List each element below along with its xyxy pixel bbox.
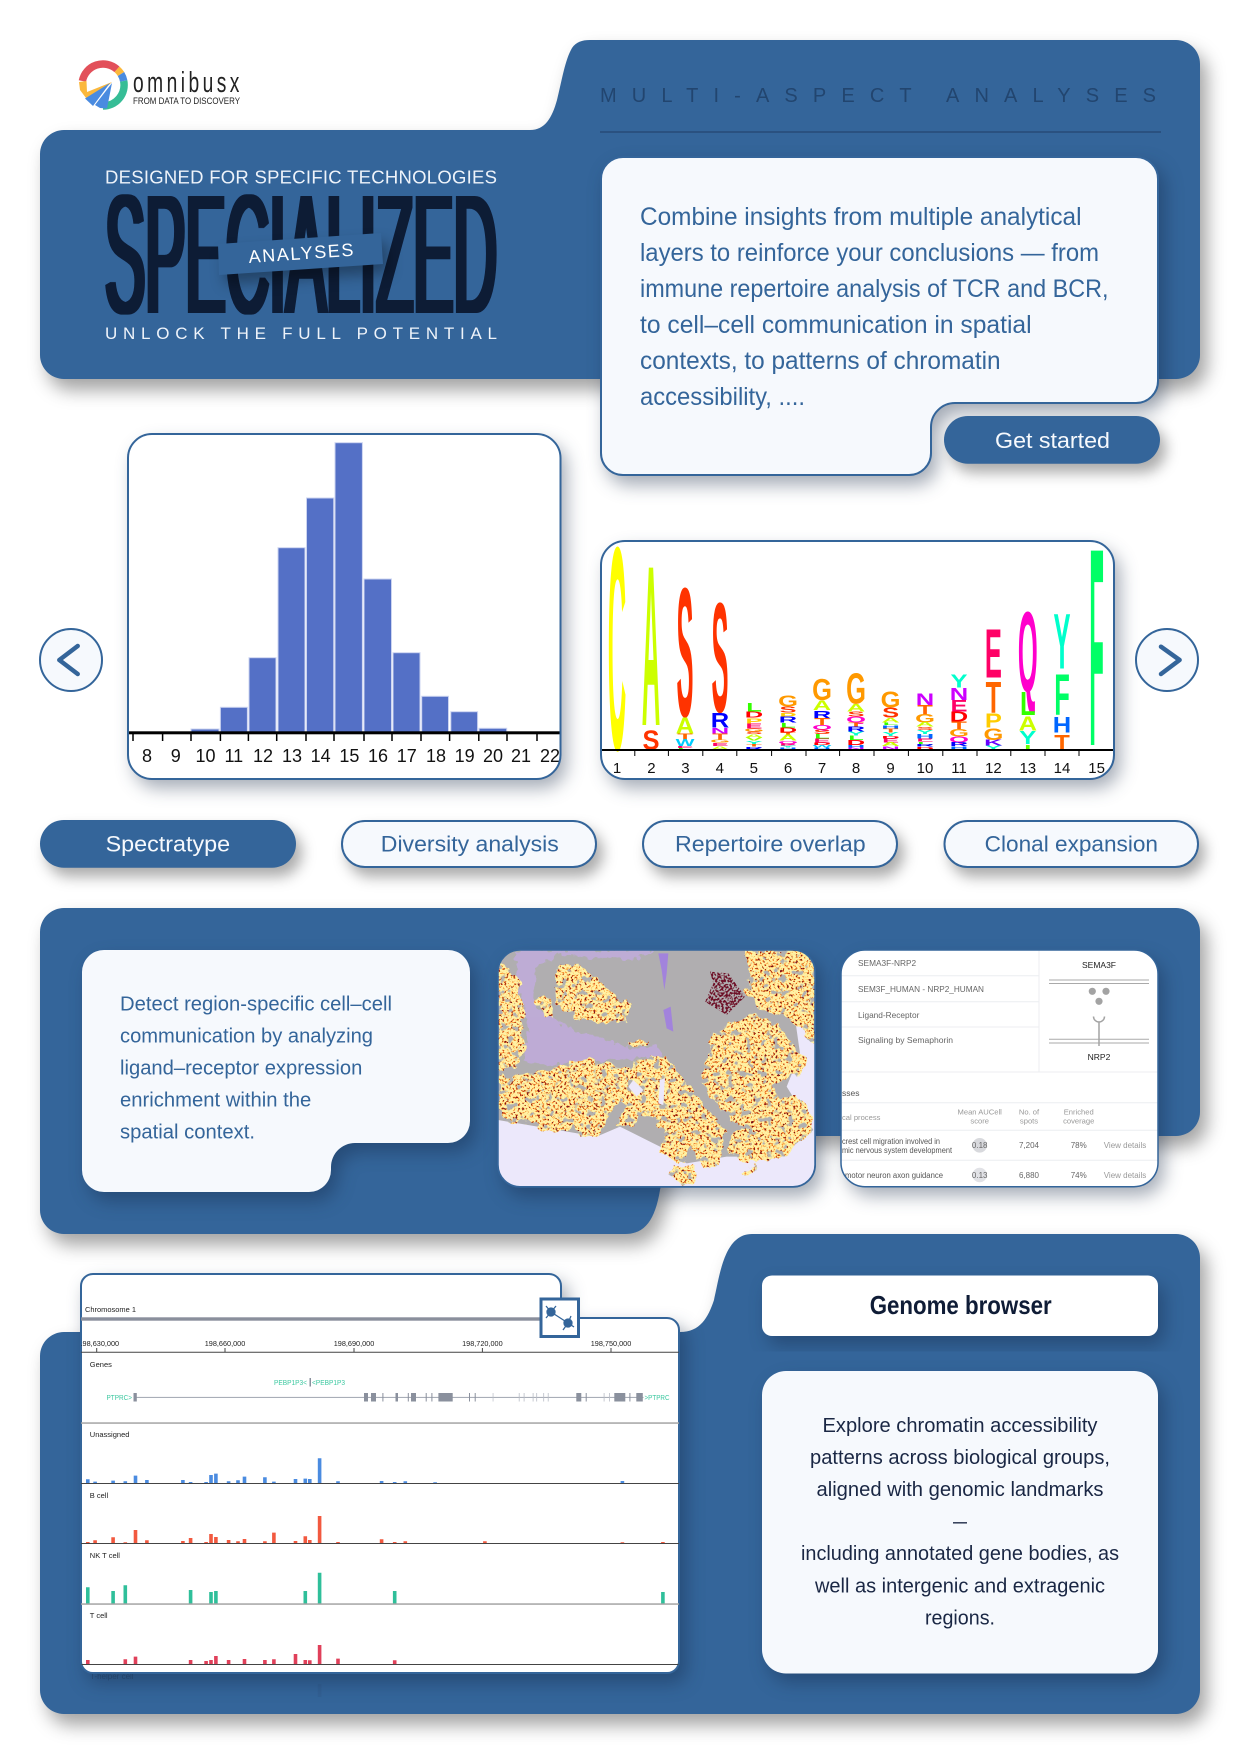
logo axis labels: 11 — [951, 760, 967, 777]
ligand receptor diagram — [1049, 960, 1149, 1062]
logo stacked letters: S — [916, 726, 934, 731]
tab: diversity analysis — [342, 821, 596, 867]
faint hidden track below chart — [90, 1672, 321, 1697]
processes table: 7,204 — [1019, 1141, 1040, 1150]
logo axis labels: 3 — [681, 760, 690, 777]
genome description text: patterns across biological groups, — [810, 1446, 1110, 1469]
histogram labels: 20 — [483, 746, 503, 766]
logo stacked letters: L — [746, 701, 762, 715]
logo stacked letters: R — [847, 725, 866, 733]
logo axis labels: 12 — [985, 760, 1002, 777]
logo stacked letters: L — [814, 733, 830, 740]
processes table: mic nervous system development — [842, 1146, 953, 1155]
gene track — [90, 1360, 670, 1402]
processes table: No. of — [1019, 1108, 1040, 1116]
logo axis — [601, 749, 1114, 751]
logo stacked letters: E — [985, 617, 1002, 694]
logo stacked letters: A — [916, 721, 934, 728]
logo axis labels: 1 — [613, 760, 621, 777]
logo stacked letters: T — [951, 720, 967, 732]
histogram axis — [127, 731, 562, 734]
description text: contexts, to patterns of chromatin — [640, 347, 1001, 375]
chart: genome browser tracks — [79, 1274, 679, 1673]
logo axis labels: 14 — [1054, 760, 1070, 777]
chart: sequence logo — [596, 538, 1132, 800]
tissue background — [498, 1026, 814, 1186]
arrow: previous — [40, 629, 102, 691]
logo stacked letters: Q — [812, 724, 832, 731]
logo stacked letters: A — [881, 717, 900, 724]
logo stacked letters: R — [950, 741, 968, 747]
logo stacked letters: N — [950, 684, 968, 704]
logo stacked letters: G — [812, 673, 832, 707]
logo stacked letters: Y — [745, 740, 763, 745]
logo stacked letters: R — [916, 744, 934, 747]
ligand receptor diagram: NRP2 — [1088, 1052, 1111, 1062]
logo stacked letters: Y — [847, 730, 865, 737]
logo stacked letters: I — [1024, 743, 1031, 752]
logo stacked letters: N — [881, 745, 900, 750]
histogram labels: 15 — [339, 746, 359, 766]
spatial text: ligand–receptor expression — [120, 1057, 362, 1080]
logo stacked letters: N — [711, 727, 729, 736]
logo stacked letters: H — [881, 724, 900, 729]
button: get started: Get started — [995, 428, 1110, 453]
image: spatial tissue map — [498, 950, 815, 1187]
logo stacked letters: W — [813, 744, 832, 748]
histogram labels: 17 — [397, 746, 417, 766]
logo stacked letters: T — [986, 672, 1001, 722]
kicker: DESIGNED FOR SPECIFIC TECHNOLOGIES — [105, 166, 497, 188]
faint hidden track below chart: T-helper cell — [90, 1672, 134, 1681]
infographic canvas: SPECIALIZED — [105, 160, 497, 350]
coordinate axis: 198,690,000 — [334, 1339, 374, 1348]
description text: Combine insights from multiple analytical — [640, 203, 1082, 231]
histogram labels: 8 — [142, 746, 152, 766]
coordinate axis: 198,750,000 — [591, 1339, 631, 1348]
histogram labels: 12 — [253, 746, 273, 766]
card: genome browser title: Genome browser — [870, 1290, 1052, 1320]
logo stacked letters: L — [917, 741, 933, 745]
purple regions — [515, 950, 673, 1065]
logo stacked letters: E — [813, 737, 831, 744]
coordinate axis — [81, 1341, 679, 1353]
logo stacked letters: D — [916, 746, 934, 750]
histogram labels — [142, 749, 559, 762]
ligand receptor diagram: SEMA3F — [1082, 960, 1116, 970]
histogram bars — [191, 443, 507, 733]
logo stacked letters: W — [676, 738, 695, 748]
tab: clonal expansion: Clonal expansion — [985, 832, 1158, 856]
logo stacked letters: T — [677, 732, 693, 742]
histogram labels: 18 — [426, 746, 446, 766]
processes table — [842, 1088, 1146, 1182]
description text: accessibility, .... — [640, 383, 805, 411]
processes table: View details — [1104, 1141, 1146, 1150]
logo stacked letters: Q — [949, 735, 969, 744]
logo stacked letters: E — [745, 722, 763, 730]
logo stacked letters: E — [677, 745, 693, 749]
tab: spectratype — [40, 820, 296, 868]
logo stacked letters: L — [780, 721, 796, 729]
coordinate axis: 198,720,000 — [462, 1339, 503, 1348]
logo axis labels: 7 — [818, 760, 826, 777]
logo stacked letters: R — [813, 709, 831, 721]
logo stacked letters: L — [848, 734, 864, 741]
logo stacked letters: Y — [985, 744, 1002, 750]
logo stacked letters: G — [881, 688, 901, 713]
tab: repertoire overlap: Repertoire overlap — [675, 832, 866, 856]
logo axis labels: 2 — [647, 760, 656, 777]
logo stacked letters: Y — [950, 670, 968, 692]
logo stacked letters: D — [813, 741, 831, 746]
logo stacked letters: L — [883, 722, 898, 726]
card: genome browser description — [762, 1371, 1158, 1674]
processes table: coverage — [1063, 1116, 1094, 1126]
logo stacked letters: H — [916, 733, 934, 740]
logo stacked letters: K — [984, 739, 1003, 748]
processes table: spots — [1020, 1116, 1038, 1126]
logo axis labels: 8 — [852, 760, 860, 777]
logo stacked letters: T — [1054, 731, 1070, 754]
spatial text: spatial context. — [120, 1121, 255, 1144]
processes table: 78% — [1071, 1141, 1087, 1150]
logo stacked letters: G — [983, 724, 1003, 744]
logo axis labels: 4 — [716, 760, 724, 777]
logo stacked letters: T — [746, 743, 762, 748]
track: unassigned: Unassigned — [90, 1430, 129, 1439]
logo stacked letters: Q — [1018, 588, 1038, 717]
info rows: SEM3F_HUMAN - NRP2_HUMAN — [858, 984, 984, 994]
coordinate axis: 198,660,000 — [205, 1339, 245, 1348]
processes table: Mean AUCell — [958, 1108, 1002, 1116]
logo stacked letters: E — [916, 737, 934, 743]
info rows: SEMA3F-NRP2 — [858, 958, 916, 968]
processes table: 0.18 — [972, 1141, 988, 1150]
spatial text: communication by analyzing — [120, 1025, 373, 1048]
histogram labels: 16 — [368, 746, 388, 766]
logo axis labels: 13 — [1019, 760, 1036, 777]
histogram labels: 22 — [540, 746, 560, 766]
logo stacked letters: R — [779, 716, 798, 724]
genome description text: Explore chromatin accessibility — [822, 1414, 1098, 1437]
logo stacked letters: S — [711, 571, 729, 745]
logo stacked letters: R — [711, 708, 729, 732]
panel: genome browser — [40, 1234, 1200, 1714]
logo stacked letters: G — [778, 693, 798, 710]
tab: spectratype: Spectratype — [106, 832, 230, 856]
logo stacked letters: T — [848, 721, 865, 728]
logo stacked letters: Y — [1053, 598, 1071, 686]
logo axis labels — [614, 763, 1104, 773]
logo stacked letters: P — [745, 717, 763, 725]
logo stacked letters: L — [677, 748, 693, 750]
logo stacked letters: G — [846, 664, 866, 713]
logo axis labels: 9 — [886, 760, 895, 777]
track: T cell — [81, 1611, 679, 1665]
logo stacked letters: H — [779, 747, 797, 750]
logo stacked letters: G — [915, 712, 935, 725]
logo stacked letters: A — [813, 699, 832, 713]
gene track: >PTPRC — [644, 1393, 670, 1402]
logo axis labels: 5 — [750, 760, 758, 777]
card: multi-aspect description — [601, 157, 1158, 475]
spatial text — [120, 993, 392, 1144]
coordinate axis: 198,630,000 — [79, 1339, 119, 1348]
processes table: 0.13 — [972, 1171, 988, 1180]
genome description text: regions. — [925, 1606, 995, 1630]
logo stacked letters: Y — [916, 729, 934, 735]
histogram labels: 13 — [282, 746, 302, 766]
logo tagline: FROM DATA TO DISCOVERY — [133, 96, 241, 107]
description text: immune repertoire analysis of TCR and BCR, — [640, 275, 1108, 303]
logo stacked letters: P — [985, 709, 1002, 732]
logo axis labels: 6 — [784, 760, 792, 777]
logo stacked letters: E — [779, 742, 797, 747]
histogram labels: 10 — [195, 746, 216, 766]
arrow: next — [1136, 629, 1198, 691]
logo wordmark: omnibusx — [133, 67, 239, 99]
gene track: PTPRC> — [106, 1393, 132, 1402]
spatial text: enrichment within the — [120, 1089, 311, 1112]
genome description text: aligned with genomic landmarks — [816, 1478, 1104, 1501]
logo stacked letters: T — [814, 717, 830, 728]
logo stacked letters: A — [676, 713, 694, 739]
logo stacked letters: Q — [778, 740, 798, 744]
logo stacked letters: S — [882, 705, 899, 721]
histogram labels: 11 — [224, 746, 243, 766]
logo stacked letters: D — [745, 710, 763, 719]
logo stacked letters: Y — [779, 746, 797, 748]
logo stacked letters: P — [779, 711, 797, 719]
logo stacked letters: A — [642, 520, 660, 774]
logo: omnibusx — [79, 64, 241, 108]
sub heading: UNLOCK THE FULL POTENTIAL — [105, 324, 497, 343]
dark spot region — [705, 972, 745, 1015]
logo stacked letters: S — [779, 705, 797, 715]
logo stacked letters: Y — [1019, 727, 1036, 748]
card: spatial description — [82, 950, 470, 1192]
logo stacked letters: A — [779, 734, 798, 743]
logo stacked letters: T — [780, 731, 796, 736]
card: genome browser title — [762, 1276, 1158, 1336]
histogram labels: 19 — [455, 746, 475, 766]
logo stacked letters: N — [916, 689, 934, 709]
card: ligand receptor table — [841, 950, 1158, 1187]
logo stacked letters: D — [950, 709, 968, 725]
genome description text — [801, 1414, 1119, 1630]
expression blobs — [498, 951, 815, 1186]
chromosome bar: Chromosome 1 — [85, 1305, 136, 1314]
logo stacked letters: T — [712, 732, 728, 741]
logo stacked letters: T — [883, 727, 899, 734]
logo stacked letters — [608, 546, 1104, 752]
genome description text: including annotated gene bodies, as — [801, 1542, 1119, 1565]
track: B cell: B cell — [90, 1491, 108, 1500]
logo stacked letters: H — [1053, 714, 1071, 738]
processes table: 6,880 — [1019, 1171, 1040, 1180]
processes table: View details — [1104, 1171, 1146, 1180]
processes table: cal process — [842, 1113, 881, 1122]
tab: clonal expansion — [944, 821, 1198, 867]
logo stacked letters: Q — [846, 715, 866, 725]
logo stacked letters: H — [950, 745, 968, 750]
logo ring — [79, 64, 124, 108]
logo stacked letters: S — [676, 549, 694, 755]
histogram labels: 9 — [171, 746, 181, 766]
logo stacked letters: E — [711, 742, 729, 747]
logo stacked letters: S — [813, 728, 831, 735]
logo stacked letters: E — [950, 696, 968, 716]
tab: repertoire overlap — [643, 821, 897, 867]
genome description text: — — [953, 1510, 967, 1533]
logo stacked letters: S — [847, 710, 865, 718]
logo axis labels: 15 — [1088, 760, 1105, 777]
tab: diversity analysis: Diversity analysis — [381, 832, 559, 856]
logo stacked letters: F — [1054, 662, 1070, 728]
logo stacked letters: S — [745, 731, 763, 735]
processes table: 74% — [1071, 1171, 1087, 1180]
logo stacked letters: F — [1089, 491, 1104, 806]
logo stacked letters: G — [710, 738, 730, 744]
processes table: crest cell migration involved in — [842, 1137, 940, 1146]
logo stacked letters: D — [779, 726, 797, 734]
histogram labels: 14 — [311, 746, 331, 766]
chart: spectratype histogram — [127, 434, 562, 779]
logo stacked letters: S — [642, 724, 660, 756]
histogram labels: 21 — [511, 746, 531, 766]
processes table: sses — [842, 1088, 859, 1098]
logo stacked letters: N — [847, 747, 865, 750]
processes table: score — [970, 1116, 989, 1126]
logo axis labels: 10 — [917, 760, 933, 777]
processes table: motor neuron axon guidance — [845, 1171, 943, 1180]
logo stacked letters: D — [881, 735, 900, 739]
track: T cell: T cell — [90, 1611, 108, 1620]
logo stacked letters: G — [949, 727, 969, 740]
track: unassigned — [81, 1430, 679, 1484]
logo stacked letters: H — [813, 747, 831, 750]
section title: multi-aspect analyses: MULTI-ASPECT ANALYSES — [600, 85, 1156, 107]
description text: layers to reinforce your conclusions — from — [640, 239, 1099, 267]
logo stacked letters: C — [608, 487, 626, 811]
genome description text: well as intergenic and extragenic — [814, 1574, 1105, 1598]
track: NK T cell: NK T cell — [90, 1551, 120, 1560]
gene track: <PEBP1P3 — [312, 1378, 345, 1387]
track: NK T cell — [81, 1551, 679, 1605]
logo stacked letters: Y — [882, 731, 899, 737]
panel: spatial communication — [40, 908, 1200, 1234]
panel: header — [40, 40, 1200, 379]
gaps inside tissue — [628, 1078, 665, 1105]
ribbon: ANALYSES — [248, 240, 354, 267]
button: get started — [944, 416, 1160, 464]
description text — [640, 203, 1108, 411]
info rows — [841, 950, 1158, 1160]
logo stacked letters: A — [1019, 712, 1037, 735]
info rows: Ligand-Receptor — [858, 1010, 920, 1020]
logo stacked letters: G — [744, 727, 764, 733]
spatial text: Detect region-specific cell–cell — [120, 993, 392, 1016]
logo stacked letters: D — [847, 738, 865, 747]
logo stacked letters: E — [882, 737, 899, 744]
heading block: specialized analyses — [105, 160, 497, 350]
processes table: Enriched — [1064, 1108, 1094, 1116]
ribbon — [218, 233, 383, 275]
info rows: Signaling by Semaphorin — [858, 1035, 953, 1045]
icon: network box — [541, 1299, 578, 1336]
logo stacked letters: A — [847, 702, 865, 715]
track: B cell — [81, 1491, 679, 1544]
chromosome bar — [81, 1305, 541, 1321]
logo stacked letters: A — [711, 745, 729, 750]
gene track: PEBP1P3< — [274, 1378, 307, 1387]
logo stacked letters: H — [847, 744, 865, 748]
description text: to cell–cell communication in spatial — [640, 311, 1032, 339]
logo stacked letters: A — [745, 733, 763, 738]
gene track: Genes — [90, 1360, 112, 1369]
logo stacked letters: A — [881, 741, 900, 747]
logo stacked letters: L — [1020, 686, 1036, 723]
logo stacked letters: R — [745, 746, 763, 750]
logo stacked letters: V — [745, 736, 764, 742]
logo stacked letters: T — [917, 703, 933, 718]
